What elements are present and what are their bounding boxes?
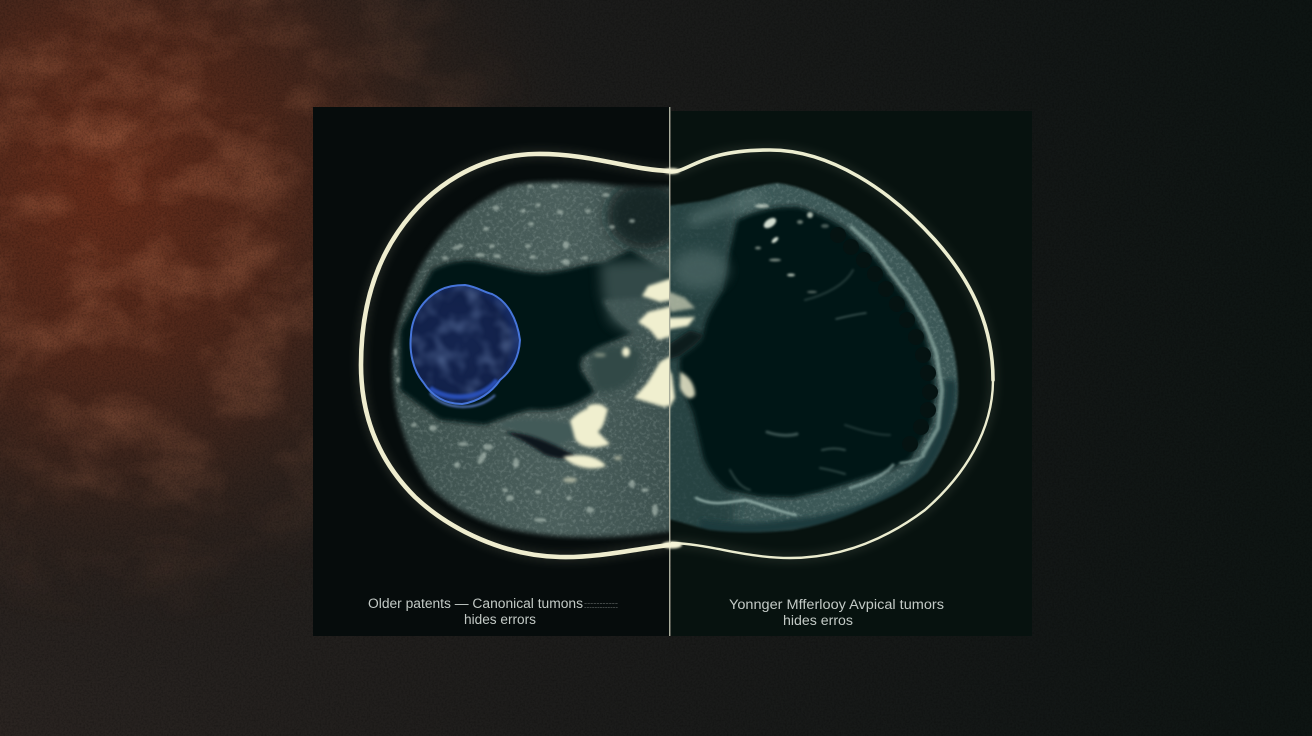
centre divider line	[669, 107, 670, 636]
bright fringe along cavity edge	[850, 226, 942, 456]
outer ring: right	[670, 150, 993, 558]
caption: left scan: Older patents — Canonical tumons	[368, 596, 583, 611]
outer ring: left	[361, 154, 670, 557]
ring join highlights	[662, 168, 682, 548]
tumor highlighted in blue	[410, 284, 521, 410]
caption: right scan: hides erros	[783, 613, 853, 628]
dark cavity with scalloped edge	[680, 207, 938, 498]
caption: right scan: Yonnger Mfferlooy Avpical tumors	[729, 597, 944, 612]
caption: left scan: hides errors	[464, 612, 536, 627]
caption: left scan: -----------	[584, 600, 620, 605]
tissue: right section	[670, 182, 960, 534]
panel: left scan, older patients	[313, 107, 683, 636]
caption: left scan	[368, 596, 620, 627]
panel: right scan, younger patients	[660, 111, 1032, 636]
speckles: tissue highlights	[393, 184, 658, 522]
bright bands in cavity	[696, 270, 924, 515]
bright structures: centre	[563, 278, 672, 482]
bright structures: centre right	[665, 290, 695, 410]
caption: left scan: -------------	[584, 604, 619, 609]
caption: right scan	[729, 597, 944, 628]
tissue: left section	[385, 175, 683, 545]
